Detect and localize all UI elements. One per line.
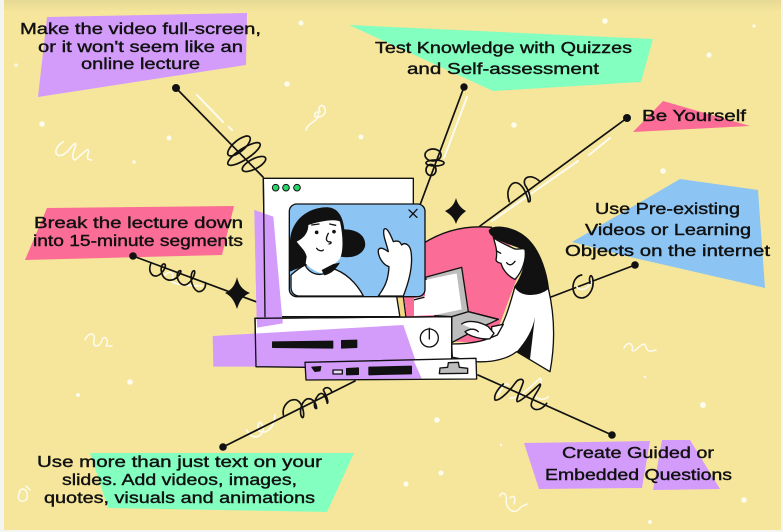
woman cuff <box>492 324 503 337</box>
close icon <box>409 209 417 217</box>
text: pre-existing tip: Videos or Learning <box>585 222 751 239</box>
text: quizzes tip: Test Knowledge with Quizzes <box>375 40 632 57</box>
callout shape: pink be yourself <box>633 101 750 132</box>
callout shape: blue right <box>572 179 765 288</box>
connector: segments tip <box>129 252 265 305</box>
connector: quizzes tip <box>420 83 468 205</box>
connector: visuals tip <box>219 381 355 451</box>
presenter hair <box>290 207 365 272</box>
connector: embedded questions tip <box>478 375 616 439</box>
window control dots <box>272 184 300 191</box>
callout shape: purple bottom right <box>524 440 720 490</box>
callout shape: green bottom <box>90 453 354 512</box>
woman hair <box>489 227 548 294</box>
pink arch <box>410 227 525 343</box>
video popup with presenter <box>289 204 425 297</box>
central computer <box>213 178 477 380</box>
text: be yourself: Be Yourself <box>642 108 747 125</box>
sleeve shadow <box>517 317 535 359</box>
presenter face <box>297 220 342 273</box>
woman smile and eye <box>497 251 515 265</box>
callout shape: green top <box>349 25 653 91</box>
arch outline <box>423 227 492 243</box>
browser window <box>254 178 413 323</box>
woman hand <box>462 321 494 339</box>
callout shape: purple top left <box>38 13 247 97</box>
text: embedded questions tip: Embedded Questions <box>545 467 732 484</box>
text: visuals tip: Use more than just text on your <box>37 454 323 471</box>
text: pre-existing tip: Use Pre-existing <box>595 201 740 218</box>
laptop <box>413 267 498 343</box>
presenter hand <box>378 229 412 296</box>
woman face <box>493 237 525 279</box>
text: full-screen tip: Make the video full-screen, <box>20 21 261 38</box>
connector: pre-existing tip <box>551 261 639 298</box>
callout shape: pink left <box>25 206 234 260</box>
keyboard <box>305 358 477 380</box>
computer base <box>213 317 452 378</box>
woman body <box>452 287 554 372</box>
connector: full-screen tip <box>172 84 268 177</box>
presenter features <box>312 224 336 251</box>
woman at laptop <box>410 227 554 372</box>
text: embedded questions tip: Create Guided or <box>562 445 715 462</box>
text: segments tip: into 15-minute segments <box>33 233 243 250</box>
icon: diamond left <box>225 277 250 309</box>
popup outline <box>289 204 425 297</box>
text: quizzes tip: and Self-assessment <box>407 61 600 78</box>
connector: be yourself tip <box>480 114 631 226</box>
text: visuals tip: quotes, visuals and animations <box>44 490 315 507</box>
presenter body <box>291 265 363 296</box>
text: visuals tip: slides. Add videos, images, <box>62 472 297 489</box>
computer stand strip <box>397 297 414 317</box>
presenter neck shadow <box>322 263 340 275</box>
text: full-screen tip: or it won't seem like an <box>38 39 243 56</box>
purple strip behind window <box>254 210 283 323</box>
text: segments tip: Break the lecture down <box>34 215 243 232</box>
icon: diamond top <box>445 198 466 224</box>
text: full-screen tip: online lecture <box>81 56 200 73</box>
text: pre-existing tip: Objects on the internet <box>565 243 771 260</box>
